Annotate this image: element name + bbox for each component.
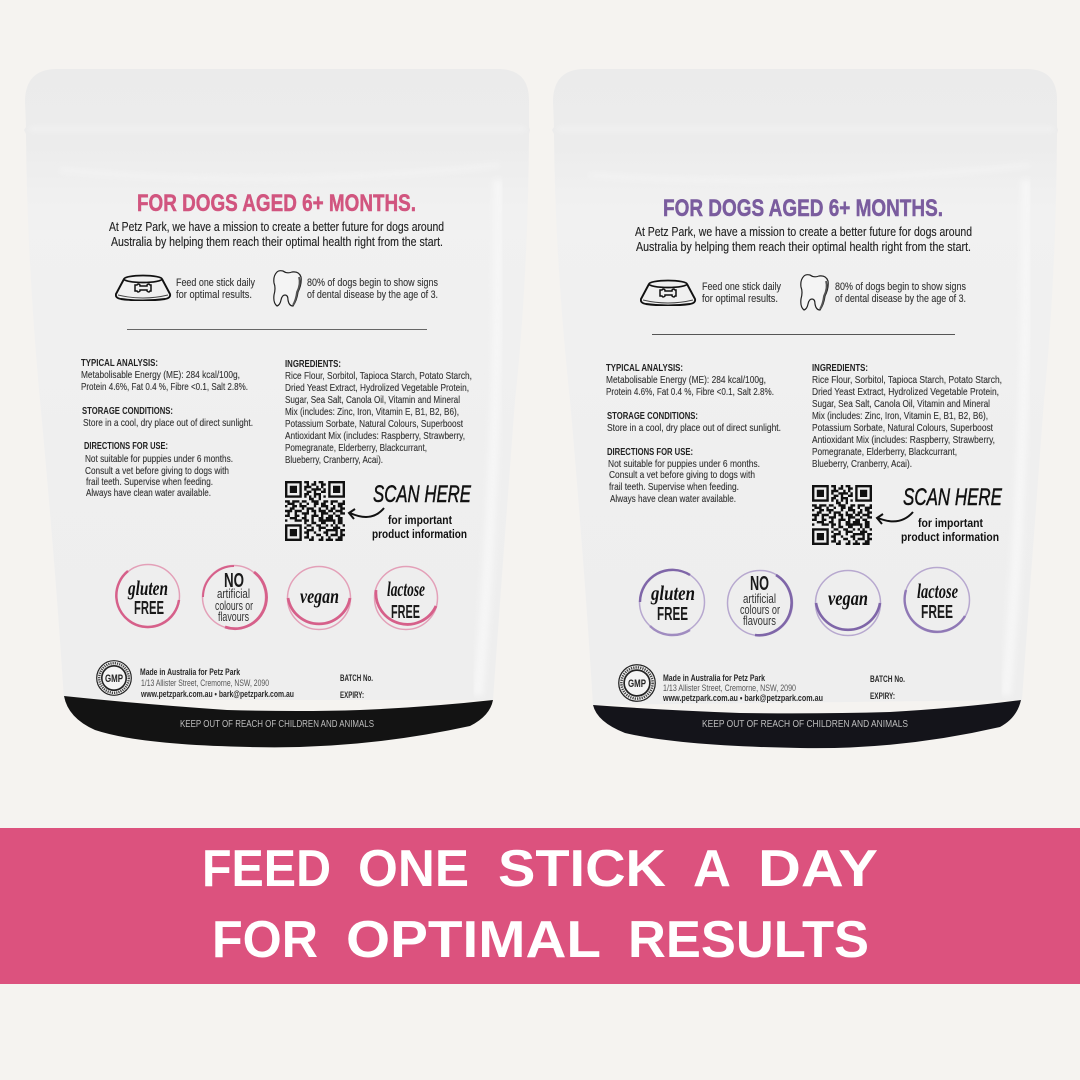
icon: tooth xyxy=(801,275,828,310)
banner line 2: RESULTS xyxy=(628,911,869,969)
scan caption: for important xyxy=(918,518,983,530)
intro text: At Petz Park, we have a mission to create a better future for dogs around xyxy=(109,220,444,234)
QR code xyxy=(812,485,872,545)
scan caption xyxy=(372,515,467,541)
badge: lactose free xyxy=(374,566,438,630)
directions for use: Consult a vet before giving to dogs with xyxy=(85,465,229,477)
badge: vegan xyxy=(816,570,880,636)
arrow to QR code xyxy=(349,508,384,519)
typical analysis: TYPICAL ANALYSIS: xyxy=(606,363,683,374)
manufacturer details: Made in Australia for Petz Park xyxy=(663,673,766,683)
typical analysis: Metabolisable Energy (ME): 284 kcal/100g, xyxy=(81,369,240,381)
batch and expiry: BATCH No. xyxy=(870,674,905,684)
typical analysis xyxy=(606,363,774,398)
typical analysis: Protein 4.6%, Fat 0.4 %, Fibre <0.1, Salt 2.8%. xyxy=(81,381,248,393)
badge: no artificial colours or flavours: artificial xyxy=(743,592,776,606)
banner line 1: DAY xyxy=(758,840,878,898)
manufacturer details: Made in Australia for Petz Park xyxy=(140,667,241,677)
feeding note: for optimal results. xyxy=(702,293,778,305)
directions for use: frail teeth. Supervise when feeding. xyxy=(86,476,213,488)
banner line 2: OPTIMAL xyxy=(346,911,601,969)
ingredients: Dried Yeast Extract, Hydrolized Vegetable Protein, xyxy=(285,382,469,394)
directions for use xyxy=(84,441,233,499)
intro text: Australia by helping them reach their optimal health right from the start. xyxy=(636,240,971,254)
ingredients: INGREDIENTS: xyxy=(285,359,341,370)
warning text: KEEP OUT OF REACH OF CHILDREN AND ANIMALS xyxy=(702,718,908,730)
batch and expiry: EXPIRY: xyxy=(870,691,895,701)
directions for use: Not suitable for puppies under 6 months. xyxy=(85,453,233,465)
badge: gluten free xyxy=(116,564,180,628)
panel: pink variant pouch xyxy=(24,69,530,747)
scan here label: SCAN HERE xyxy=(903,484,1003,511)
ingredients: Antioxidant Mix (includes: Raspberry, Strawberry, xyxy=(812,434,995,446)
directions for use: Consult a vet before giving to dogs with xyxy=(609,469,755,481)
ingredients: Pomegranate, Elderberry, Blackcurrant, xyxy=(812,446,957,458)
icon: dog bowl xyxy=(116,276,170,300)
badge: no artificial colours or flavours: NO xyxy=(750,573,769,595)
banner line 1 xyxy=(202,840,878,898)
ingredients xyxy=(285,359,472,466)
GMP seal: GMP xyxy=(628,678,646,690)
typical analysis: TYPICAL ANALYSIS: xyxy=(81,358,158,369)
arrow to QR code xyxy=(877,512,913,524)
badge: no artificial colours or flavours xyxy=(728,570,792,636)
directions for use: frail teeth. Supervise when feeding. xyxy=(609,481,739,493)
manufacturer details: 1/13 Allister Street, Cremorne, NSW, 2090 xyxy=(141,678,269,688)
feeding note: Feed one stick daily xyxy=(702,281,781,293)
dental note: of dental disease by the age of 3. xyxy=(835,293,966,305)
badge: no artificial colours or flavours: artificial xyxy=(217,587,250,601)
icon: dog bowl xyxy=(641,280,695,306)
ingredients: Dried Yeast Extract, Hydrolized Vegetable Protein, xyxy=(812,386,999,398)
dental note: 80% of dogs begin to show signs xyxy=(307,277,438,289)
batch and expiry xyxy=(870,674,905,701)
badge: gluten free: gluten xyxy=(127,576,168,600)
typical analysis: Protein 4.6%, Fat 0.4 %, Fibre <0.1, Salt 2.8%. xyxy=(606,386,774,398)
storage conditions: STORAGE CONDITIONS: xyxy=(82,406,173,417)
badge: lactose free: lactose xyxy=(917,579,958,603)
storage conditions: Store in a cool, dry place out of direct sunlight. xyxy=(607,422,781,434)
typical analysis xyxy=(81,358,248,393)
ingredients: Antioxidant Mix (includes: Raspberry, Strawberry, xyxy=(285,430,465,442)
ingredients: Sugar, Sea Salt, Canola Oil, Vitamin and Mineral xyxy=(285,394,460,406)
dental note: 80% of dogs begin to show signs xyxy=(835,281,966,293)
storage conditions xyxy=(607,411,781,434)
badge: gluten free: FREE xyxy=(657,604,688,624)
batch and expiry: BATCH No. xyxy=(340,673,373,683)
badge: gluten free xyxy=(640,570,704,635)
panel: purple variant pouch xyxy=(552,69,1058,748)
directions for use: DIRECTIONS FOR USE: xyxy=(607,447,693,458)
badge: lactose free xyxy=(904,568,970,632)
badge: vegan xyxy=(288,566,350,630)
badge: no artificial colours or flavours: flavours xyxy=(218,610,249,624)
badge: no artificial colours or flavours: colours or xyxy=(740,603,780,617)
ingredients: Pomegranate, Elderberry, Blackcurrant, xyxy=(285,442,427,454)
badge: gluten free: gluten xyxy=(650,581,695,605)
heading: FOR DOGS AGED 6+ MONTHS. xyxy=(137,190,416,217)
badge: no artificial colours or flavours: NO xyxy=(224,570,244,592)
typical analysis: Metabolisable Energy (ME): 284 kcal/100g, xyxy=(606,374,766,386)
storage conditions: Store in a cool, dry place out of direct sunlight. xyxy=(83,417,253,429)
batch and expiry: EXPIRY: xyxy=(340,690,364,700)
icon: tooth xyxy=(274,271,301,306)
feeding note xyxy=(176,277,255,301)
warning text: KEEP OUT OF REACH OF CHILDREN AND ANIMALS xyxy=(180,718,374,730)
directions for use xyxy=(607,447,760,505)
scan caption: for important xyxy=(388,515,452,527)
ingredients: Potassium Sorbate, Natural Colours, Superboost xyxy=(285,418,463,430)
badge: lactose free: FREE xyxy=(391,602,420,622)
ingredients: Rice Flour, Sorbitol, Tapioca Starch, Potato Starch, xyxy=(285,370,472,382)
scan here label: SCAN HERE xyxy=(373,481,472,508)
ingredients: Mix (includes: Zinc, Iron, Vitamin E, B1, B2, B6), xyxy=(285,406,459,418)
badge: no artificial colours or flavours xyxy=(202,566,267,629)
intro text xyxy=(635,225,972,254)
badge: no artificial colours or flavours: colours or xyxy=(215,599,253,613)
pouch body xyxy=(24,69,530,700)
directions for use: DIRECTIONS FOR USE: xyxy=(84,441,168,452)
dental note: of dental disease by the age of 3. xyxy=(307,289,438,301)
badge: lactose free: lactose xyxy=(387,577,425,601)
badge: lactose free: FREE xyxy=(921,602,953,622)
banner line 2 xyxy=(212,911,869,969)
scan caption xyxy=(901,518,999,544)
pouch body xyxy=(552,69,1058,705)
heading: FOR DOGS AGED 6+ MONTHS. xyxy=(663,195,943,222)
directions for use: Always have clean water available. xyxy=(86,487,211,499)
intro text xyxy=(109,220,444,249)
ingredients: INGREDIENTS: xyxy=(812,363,868,374)
directions for use: Always have clean water available. xyxy=(610,493,736,505)
manufacturer details: www.petzpark.com.au • bark@petzpark.com.au xyxy=(140,689,294,699)
ingredients: Potassium Sorbate, Natural Colours, Superboost xyxy=(812,422,993,434)
batch and expiry xyxy=(340,673,373,700)
manufacturer details xyxy=(140,667,294,699)
intro text: Australia by helping them reach their optimal health right from the start. xyxy=(111,235,443,249)
black base band xyxy=(593,700,1021,748)
banner line 1: STICK xyxy=(498,840,666,898)
scan caption: product information xyxy=(901,532,999,544)
storage conditions: STORAGE CONDITIONS: xyxy=(607,411,698,422)
ingredients: Blueberry, Cranberry, Acai). xyxy=(285,454,383,466)
ingredients: Rice Flour, Sorbitol, Tapioca Starch, Potato Starch, xyxy=(812,374,1002,386)
ingredients: Blueberry, Cranberry, Acai). xyxy=(812,458,912,470)
banner line 1: FEED xyxy=(202,840,331,898)
feeding note: for optimal results. xyxy=(176,289,252,301)
ingredients: Sugar, Sea Salt, Canola Oil, Vitamin and Mineral xyxy=(812,398,990,410)
scan caption: product information xyxy=(372,529,467,541)
black base band xyxy=(64,696,493,747)
badge: no artificial colours or flavours: flavours xyxy=(743,614,776,628)
GMP seal: GMP xyxy=(105,673,123,685)
feeding note: Feed one stick daily xyxy=(176,277,255,289)
banner line 1: ONE xyxy=(358,840,469,898)
banner line 1: A xyxy=(693,840,731,898)
QR code xyxy=(285,481,345,541)
banner line 2: FOR xyxy=(212,911,318,969)
dental note xyxy=(835,281,966,305)
GMP seal xyxy=(619,665,655,701)
manufacturer details xyxy=(662,673,823,703)
feeding note xyxy=(702,281,781,305)
badge: vegan: vegan xyxy=(300,584,339,608)
directions for use: Not suitable for puppies under 6 months. xyxy=(608,458,760,470)
badge: gluten free: FREE xyxy=(134,598,164,618)
intro text: At Petz Park, we have a mission to create a better future for dogs around xyxy=(635,225,972,239)
storage conditions xyxy=(82,406,253,429)
manufacturer details: 1/13 Allister Street, Cremorne, NSW, 2090 xyxy=(663,683,796,693)
manufacturer details: www.petzpark.com.au • bark@petzpark.com.au xyxy=(662,693,823,703)
GMP seal xyxy=(97,661,131,695)
banner: feed one stick a day xyxy=(0,828,1080,984)
ingredients: Mix (includes: Zinc, Iron, Vitamin E, B1, B2, B6), xyxy=(812,410,988,422)
ingredients xyxy=(812,363,1002,470)
dental note xyxy=(307,277,438,301)
badge: vegan: vegan xyxy=(828,586,868,610)
